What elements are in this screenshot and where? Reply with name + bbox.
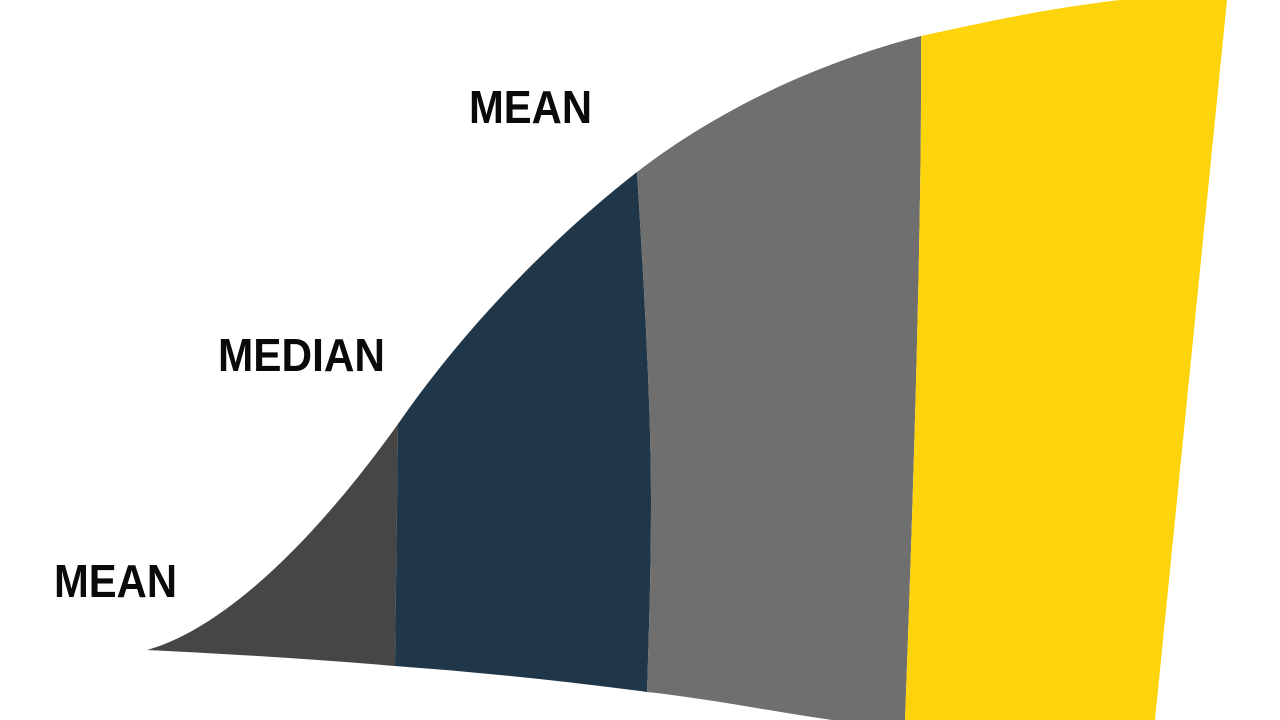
label: top mean: MEAN (469, 81, 592, 133)
segment: dark grey (147, 424, 398, 666)
label: bottom mean: MEAN (54, 555, 177, 607)
segment: navy (395, 172, 651, 692)
label: median: MEDIAN (218, 329, 385, 381)
segment: mid grey (637, 36, 921, 720)
segment: yellow (905, 0, 1227, 720)
